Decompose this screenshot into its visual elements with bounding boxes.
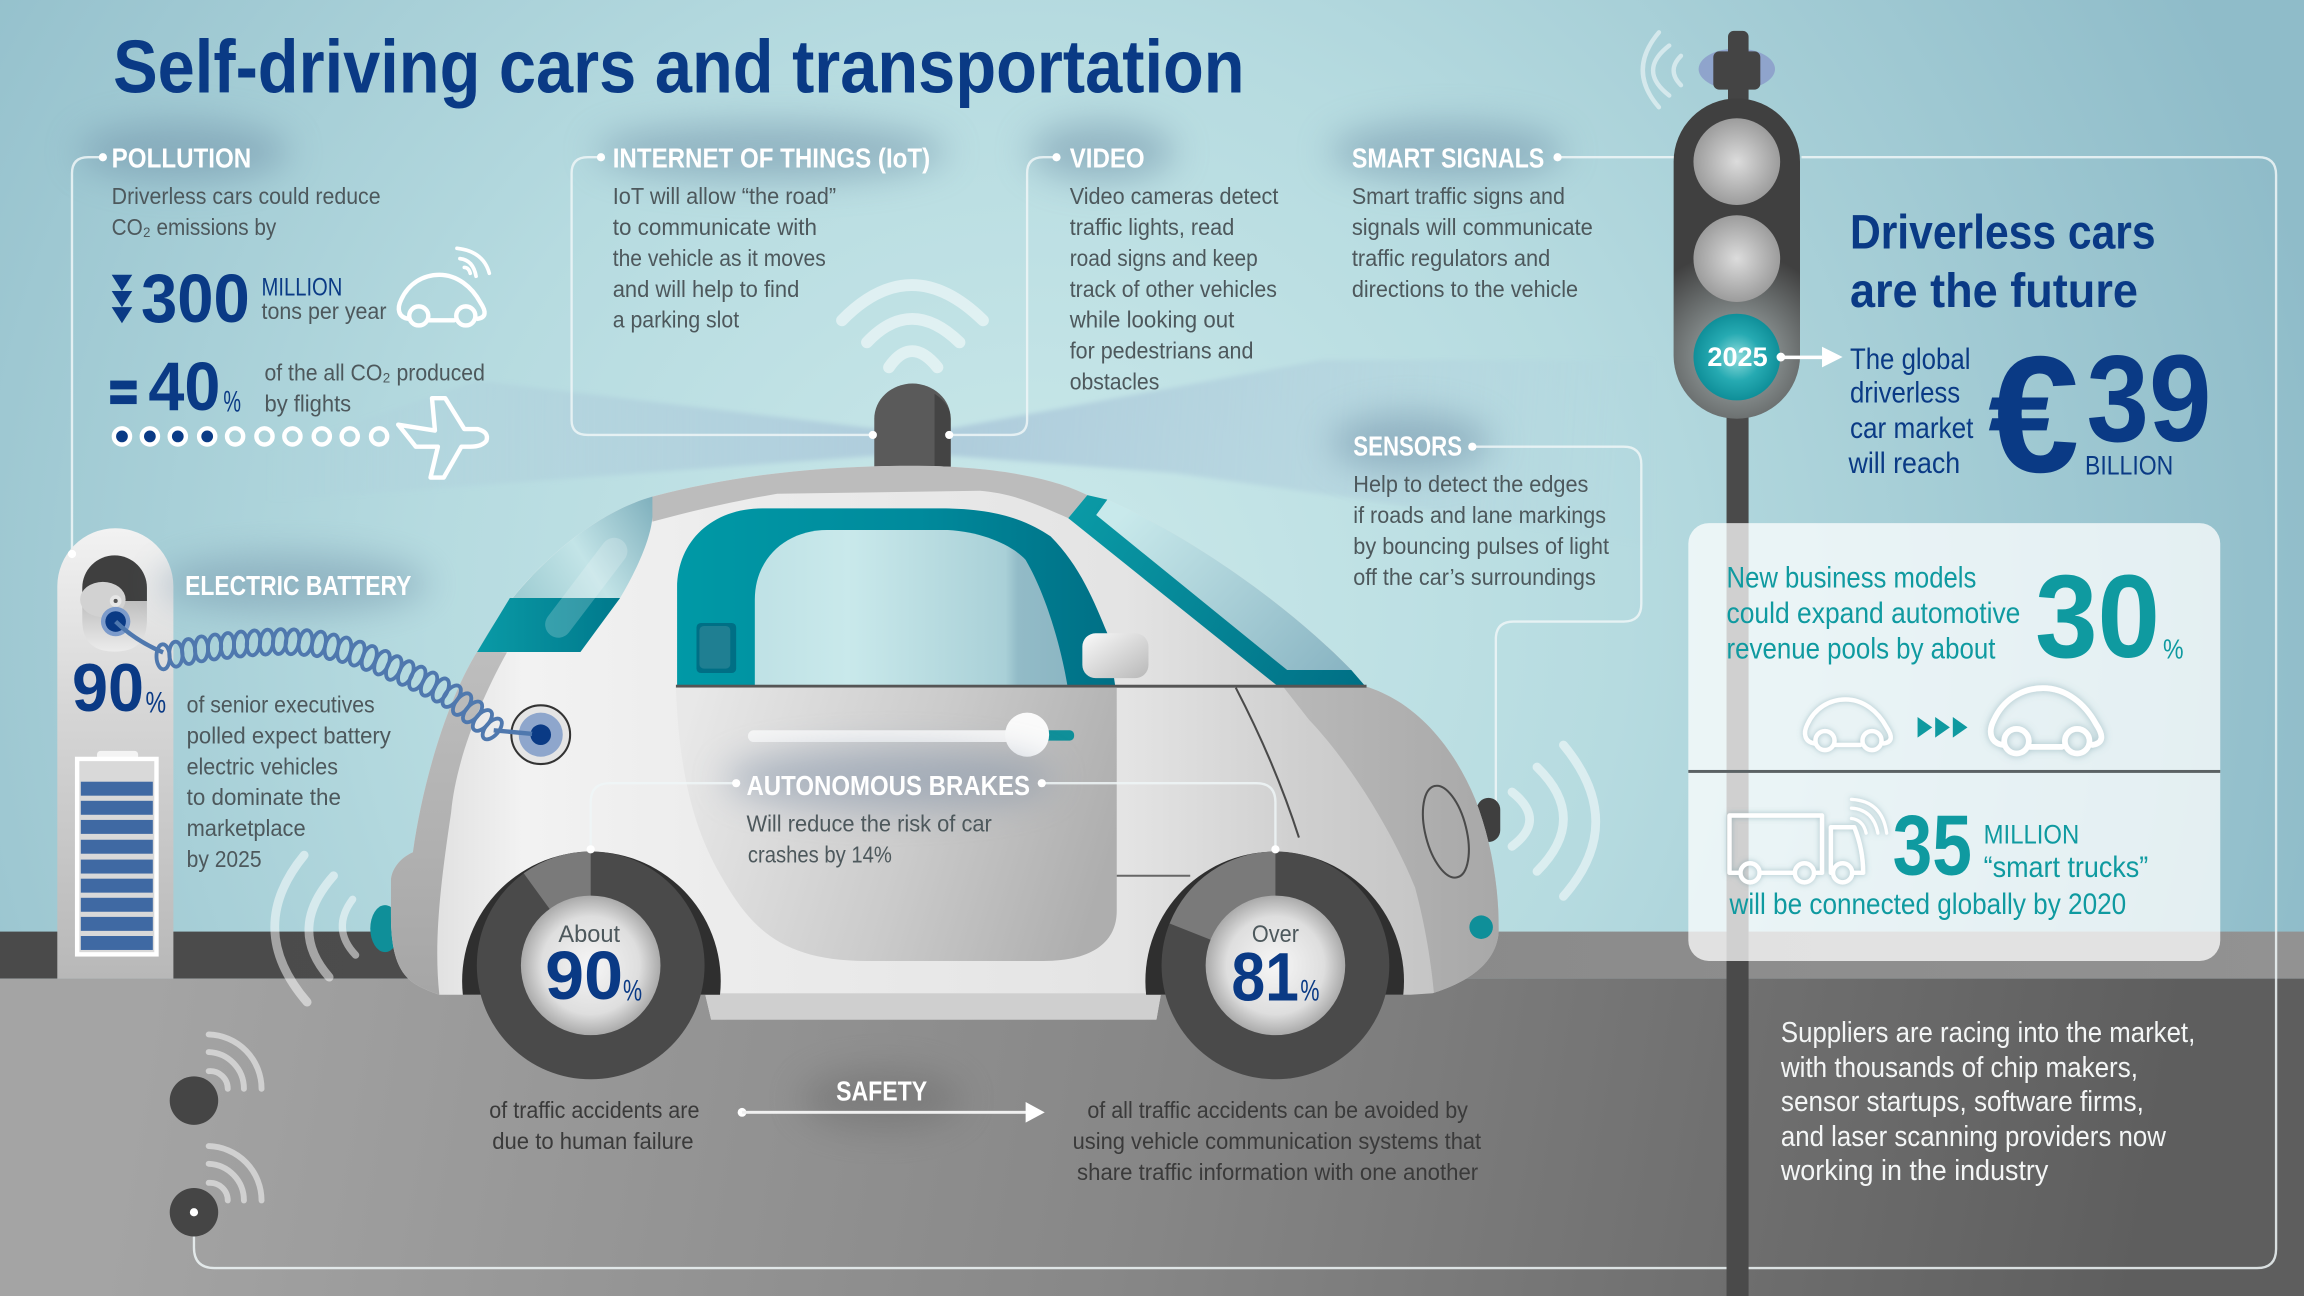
stat: 300 million tons	[141, 259, 387, 337]
text: connected globally: will be connected globally by 2020	[1729, 888, 2126, 921]
text: smart signals description	[1352, 183, 1593, 302]
heading: driverless cars	[1850, 205, 2156, 318]
stat: 30 percent: 30	[2035, 551, 2160, 682]
text: sensors description: if roads and lane markings	[1353, 502, 1606, 528]
front teal light	[1469, 915, 1493, 939]
text: video description: road signs and keep	[1070, 245, 1258, 271]
text: IoT description: and will help to find	[613, 276, 799, 302]
text: vehicle communication: of all traffic accidents can be avoided by	[1087, 1097, 1468, 1123]
icon: down triangles	[112, 275, 132, 323]
text: video description	[1069, 183, 1279, 394]
text: vehicle communication	[1073, 1097, 1482, 1185]
icon: road sensor two	[170, 1146, 262, 1236]
text: smart signals description: Smart traffic signs and	[1352, 183, 1565, 209]
stat: 300 million tons: 300	[141, 259, 250, 337]
stat: over 81 percent: %	[1300, 975, 1320, 1008]
text: sensors description: off the car’s surroundings	[1353, 564, 1596, 590]
door handle	[748, 713, 1074, 757]
text: senior executives: marketplace	[187, 815, 306, 841]
text: vehicle communication: using vehicle communication systems that	[1073, 1128, 1482, 1154]
text: pollution intro	[112, 183, 381, 240]
text: video description: track of other vehicles	[1070, 276, 1277, 302]
text: senior executives: polled expect battery	[187, 723, 391, 749]
stat: 300 million tons: MILLION	[262, 273, 342, 301]
panel: sensors	[1330, 413, 1641, 811]
text: CO2 by flights: of the all CO₂ produced	[264, 360, 485, 386]
stat: about 90 percent: %	[623, 975, 642, 1008]
text: senior executives: to dominate the	[187, 784, 341, 810]
charging post	[57, 528, 173, 979]
text: suppliers: working in the industry	[1780, 1155, 2049, 1187]
text: IoT description: IoT will allow “the road”	[613, 183, 836, 209]
text: senior executives	[187, 692, 391, 872]
text: sensors description: by bouncing pulses of light	[1353, 533, 1609, 559]
panel: safety	[489, 1070, 1482, 1185]
heading: video: VIDEO	[1070, 143, 1145, 174]
text: human failure	[489, 1097, 699, 1154]
chart: ten dots 40 percent	[114, 428, 387, 444]
text: senior executives: by 2025	[187, 846, 262, 872]
heading: sensors: SENSORS	[1353, 431, 1462, 462]
traffic light	[1674, 31, 1800, 1296]
stat: 39 billion euro: BILLION	[2085, 451, 2173, 481]
text: brakes description: Will reduce the risk of car	[746, 811, 992, 837]
roof sensor	[869, 384, 953, 467]
title: Self-driving cars and transportation	[113, 25, 1245, 109]
panel: business models and smart trucks	[1688, 523, 2220, 961]
icon: rear wave signals	[275, 855, 356, 1002]
text: senior executives: electric vehicles	[187, 753, 338, 779]
text: brakes description	[746, 811, 992, 868]
text: video description: obstacles	[1070, 368, 1159, 394]
stat: 39 billion euro	[1988, 323, 2211, 508]
text: IoT description: to communicate with	[613, 214, 817, 240]
text: video description: for pedestrians and	[1070, 338, 1253, 364]
door pillar switch	[696, 623, 736, 673]
windshield	[1068, 495, 1366, 687]
icon: traffic light signal waves	[1643, 32, 1681, 107]
stat: about 90 percent: About	[558, 921, 620, 948]
icon: battery gauge	[77, 751, 156, 954]
stat: 30 percent: %	[2163, 633, 2184, 664]
heading: pollution: POLLUTION	[112, 143, 251, 174]
text: IoT description: the vehicle as it moves	[613, 245, 826, 271]
arrow: safety	[738, 1102, 1045, 1123]
icon: wifi above roof sensor	[842, 285, 983, 367]
heading: driverless cars: are the future	[1850, 264, 2138, 318]
text: suppliers: with thousands of chip makers,	[1780, 1052, 2138, 1084]
text: sensors description	[1353, 471, 1609, 590]
long connector from traffic light to road sensor	[194, 157, 2276, 1268]
text: smart signals description: traffic regulators and	[1352, 245, 1550, 271]
rear window	[477, 497, 652, 652]
road surface	[0, 979, 2304, 1296]
stat: 40 percent: %	[223, 385, 241, 418]
icon: equals sign	[110, 381, 137, 404]
sill	[706, 993, 1161, 1020]
panel: video	[949, 122, 1279, 435]
icon: road sensor one	[170, 1034, 262, 1125]
text: new business models: could expand automotive	[1727, 597, 2020, 630]
text: senior executives: of senior executives	[187, 692, 375, 718]
panel: internet of things	[572, 122, 948, 435]
side window glass	[755, 530, 1068, 686]
stat: about 90 percent	[545, 921, 642, 1014]
stat: 35 million smart trucks: “smart trucks”	[1984, 851, 2148, 884]
stat: 90 percent executives: %	[145, 687, 166, 720]
rear wheel	[462, 852, 721, 1079]
text: new business models: New business models	[1727, 562, 1976, 595]
text: brakes description: crashes by 14%	[748, 842, 892, 868]
text: CO2 by flights: by flights	[264, 390, 351, 416]
stat: over 81 percent: Over	[1252, 921, 1299, 948]
front sensor nub	[1477, 798, 1500, 842]
roof band	[652, 466, 1088, 522]
stat: 35 million smart trucks	[1893, 798, 2148, 893]
stat: 300 million tons: tons per year	[262, 298, 387, 324]
icon: plane	[398, 398, 487, 478]
text: video description: while looking out	[1069, 307, 1235, 333]
front fender shading	[1284, 651, 1499, 992]
text: market will reach: driverless	[1850, 377, 1960, 410]
car illustration	[382, 441, 1513, 1079]
icon: connected car	[399, 248, 489, 325]
text: video description: traffic lights, read	[1070, 214, 1234, 240]
mirror	[1082, 633, 1148, 678]
label: 2025: 2025	[1707, 342, 1768, 372]
stat: 35 million smart trucks: 35	[1893, 798, 1972, 893]
panel: electric battery	[57, 528, 429, 979]
text: market will reach: will reach	[1848, 447, 1960, 480]
rear teal light	[370, 905, 400, 952]
text: pollution intro: CO₂ emissions by	[112, 214, 276, 240]
text: smart signals description: directions to the vehicle	[1352, 276, 1578, 302]
text: new business models	[1727, 562, 2020, 665]
panel: autonomous brakes	[587, 749, 1280, 868]
text: market will reach: The global	[1850, 343, 1970, 376]
heading: driverless cars: Driverless cars	[1850, 205, 2156, 259]
text: new business models: revenue pools by about	[1727, 632, 1995, 665]
charging port	[511, 705, 570, 764]
text: IoT description	[613, 183, 836, 333]
door panel	[676, 688, 1117, 961]
text: IoT description: a parking slot	[613, 307, 740, 333]
heading: electric battery: ELECTRIC BATTERY	[185, 570, 412, 601]
panel: pollution	[72, 122, 489, 555]
icon: growth arrows	[1918, 717, 1968, 738]
car body	[382, 441, 1513, 1029]
stat: 35 million smart trucks: MILLION	[1984, 819, 2079, 849]
rear quarter shading	[382, 647, 507, 995]
panel lines	[1117, 688, 1477, 882]
heading: IoT: INTERNET OF THINGS (IoT)	[613, 143, 930, 174]
charging cable	[116, 622, 550, 744]
text: sensors description: Help to detect the edges	[1353, 471, 1588, 497]
panel: smart signals	[1330, 122, 1675, 302]
panel: driverless cars are the future	[1848, 205, 2211, 508]
front wheel	[1145, 852, 1404, 1079]
text: human failure: of traffic accidents are	[489, 1097, 699, 1123]
stat: 39 billion euro: 39	[2087, 330, 2211, 468]
icon: large car	[1991, 688, 2101, 753]
text: smart signals description: signals will communicate	[1352, 214, 1593, 240]
heading: smart signals: SMART SIGNALS	[1352, 143, 1544, 174]
background sky	[0, 0, 2304, 940]
text: CO2 by flights	[264, 360, 485, 416]
sensor beams	[88, 360, 1653, 547]
road kerb band	[0, 932, 2304, 979]
stat: about 90 percent: 90	[545, 936, 623, 1014]
text: human failure: due to human failure	[492, 1128, 694, 1154]
icon: small car	[1805, 699, 1891, 750]
text: market will reach	[1848, 343, 1973, 480]
text: vehicle communication: share traffic information with one another	[1077, 1159, 1478, 1185]
side window frame	[677, 508, 1115, 686]
stat: over 81 percent: 81	[1231, 938, 1299, 1016]
icon: smart truck	[1729, 799, 1887, 882]
arrow: 2025 to market	[1776, 347, 1843, 367]
text: video description: Video cameras detect	[1070, 183, 1279, 209]
stat: 40 percent: 40	[148, 347, 220, 425]
stat: 90 percent executives: 90	[72, 651, 144, 726]
text: market will reach: car market	[1850, 412, 1973, 445]
heading: safety: SAFETY	[836, 1076, 927, 1107]
heading: autonomous brakes: AUTONOMOUS BRAKES	[746, 770, 1030, 801]
text: suppliers	[1780, 1017, 2195, 1187]
stat: 39 billion euro: €	[1988, 323, 2079, 508]
text: suppliers: Suppliers are racing into the market,	[1781, 1017, 2195, 1049]
text: pollution intro: Driverless cars could reduce	[112, 183, 381, 209]
text: suppliers: and laser scanning providers now	[1781, 1121, 2166, 1153]
text: suppliers: sensor startups, software firms,	[1781, 1086, 2144, 1118]
icon: front wave signals	[1512, 745, 1596, 896]
icon: socket and plug	[80, 555, 147, 652]
